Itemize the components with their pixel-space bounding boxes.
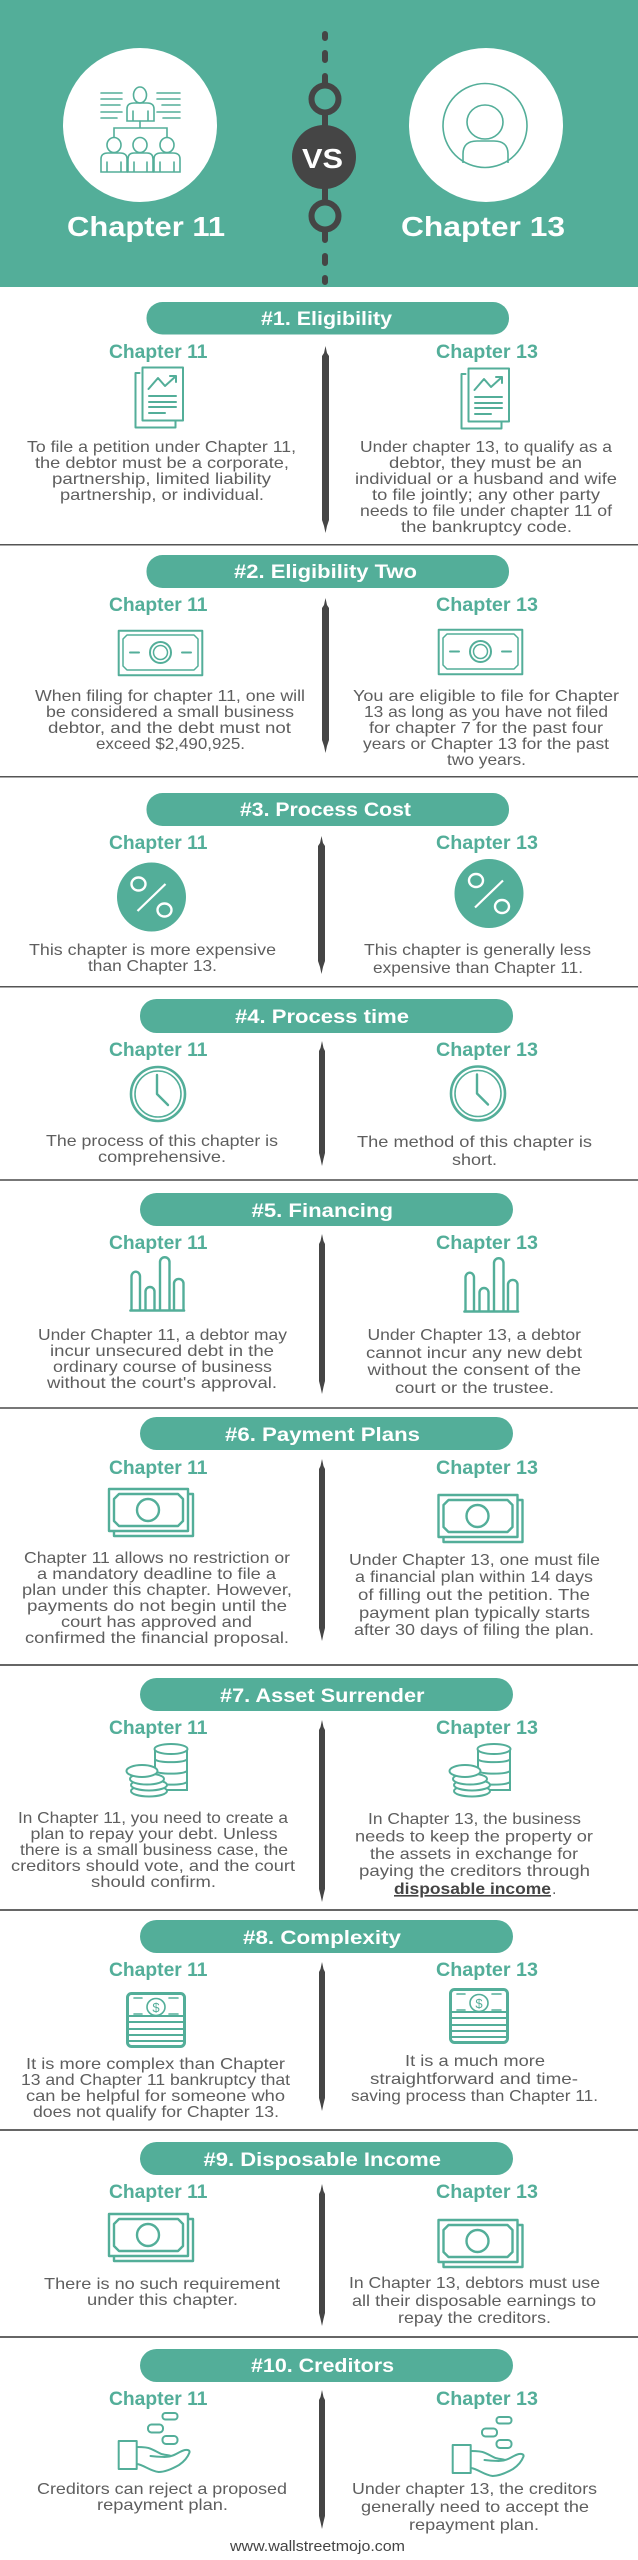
footer: website: www.wallstreetmojo.com — [229, 2538, 405, 2555]
text: Chapter 13 filing eligibility: You are eligible to file for Chapter — [353, 688, 620, 705]
heading pill — [146, 555, 509, 588]
column label: Chapter 13: Chapter 13 — [436, 1959, 538, 1981]
icon: cash stack right — [450, 1990, 508, 2042]
text: Chapter 11 payment plans: Chapter 11 allows no restriction or — [24, 1550, 291, 1567]
column label: Chapter 11: Chapter 11 — [109, 1717, 208, 1739]
text: Chapter 11 payment plans: confirmed the financial proposal. — [25, 1630, 289, 1647]
text: Chapter 11 financing: incur unsecured debt in the — [50, 1343, 274, 1360]
text: Chapter 11 payment plans: payments do not begin until the — [27, 1598, 287, 1615]
column label: Chapter 13: Chapter 13 — [436, 1232, 538, 1254]
heading pill: #8. Complexity — [243, 1927, 401, 1949]
text: Chapter 13 asset surrender: In Chapter 13, the business — [368, 1811, 581, 1828]
heading pill — [140, 2349, 513, 2382]
text: Chapter 11 complexity: can be helpful for someone who — [26, 2088, 285, 2105]
icon: banknote left — [119, 631, 202, 675]
column label: Chapter 13: Chapter 13 — [436, 594, 538, 616]
text: Chapter 11 financing: Under Chapter 11, a debtor may — [38, 1327, 287, 1344]
text: Chapter 13 financing: Under Chapter 13, a debtor — [368, 1327, 582, 1344]
text: Chapter 13 financing: without the consent of the — [366, 1362, 581, 1379]
text: Chapter 11 payment plans: court has approved and — [61, 1614, 252, 1631]
text: Chapter 13 asset surrender: disposable income — [394, 1881, 551, 1898]
text: Chapter 11 eligibility: To file a petition under Chapter 11, — [27, 439, 296, 456]
heading pill — [140, 999, 513, 1033]
column label: Chapter 11: Chapter 11 — [109, 1457, 208, 1479]
text: Chapter 13 complexity: It is a much more — [405, 2053, 545, 2070]
text: Chapter 11 payment plans — [22, 1550, 292, 1647]
divider — [319, 1459, 325, 1641]
heading pill: #5. Financing — [252, 1200, 393, 1222]
heading pill — [140, 1678, 513, 1711]
text: Chapter 13 eligibility: debtor, they must be an — [389, 455, 582, 472]
icon: coins left — [126, 1744, 188, 1796]
text: Chapter 11 asset surrender: In Chapter 11, you need to create a — [18, 1810, 288, 1827]
text: Chapter 13 complexity: straightforward and time- — [370, 2071, 578, 2088]
text: Chapter 13 payment plans: payment plan typically starts — [359, 1605, 590, 1622]
divider — [319, 1962, 325, 2111]
section 6: Payment Plans — [22, 1417, 600, 1647]
text: Chapter 13 asset surrender: the assets in exchange for — [370, 1846, 579, 1863]
text: Chapter 11 cost: This chapter is more expensive — [29, 942, 276, 959]
title: Chapter 13: Chapter 13 — [401, 211, 565, 242]
column label: Chapter 13: Chapter 13 — [436, 341, 538, 363]
text: Chapter 13 cost — [364, 942, 591, 977]
text: Chapter 13 complexity — [351, 2053, 598, 2105]
icon: percent right — [454, 859, 524, 928]
icon: percent left — [117, 862, 186, 932]
text: Chapter 13 creditors: generally need to accept the — [361, 2499, 589, 2516]
VS badge: VS — [302, 143, 343, 174]
column label: Chapter 11: Chapter 11 — [109, 832, 208, 854]
column label: Chapter 13: Chapter 13 — [436, 832, 538, 854]
text: Chapter 13 time: short. — [452, 1152, 497, 1169]
title: Chapter 11: Chapter 11 — [67, 211, 225, 242]
icon: clock left — [131, 1067, 185, 1121]
heading pill — [140, 1193, 513, 1226]
column label: Chapter 11: Chapter 11 — [109, 1039, 208, 1061]
text: Chapter 13 payment plans: after 30 days of filing the plan. — [354, 1622, 594, 1639]
text: Chapter 13 payment plans: a financial plan within 14 days — [355, 1569, 593, 1586]
section 5: Financing — [38, 1193, 583, 1397]
heading pill: #2. Eligibility Two — [234, 561, 417, 583]
text: Chapter 11 complexity: 13 and Chapter 11 bankruptcy that — [21, 2072, 291, 2089]
text: Chapter 13 disposable income: In Chapter 13, debtors must use — [349, 2275, 600, 2292]
text: Chapter 11 small business debtor: be considered a small business — [46, 704, 294, 721]
column label: Chapter 11: Chapter 11 — [109, 594, 208, 616]
text: Chapter 13 eligibility: individual or a husband and wife — [355, 471, 617, 488]
heading pill — [140, 2142, 513, 2175]
section 3: Process Cost — [29, 793, 591, 977]
VS badge — [292, 125, 356, 189]
icon: cash stack left — [128, 1994, 184, 2046]
icon: hand with coins right — [453, 2417, 524, 2476]
section 2: Eligibility Two — [35, 555, 620, 769]
icon: banknotes right — [438, 1495, 522, 1542]
heading pill: #10. Creditors — [251, 2355, 394, 2377]
text: Chapter 11 asset surrender: plan to repay your debt. Unless — [30, 1826, 278, 1843]
text: Chapter 11 eligibility: partnership, or individual. — [60, 487, 264, 504]
text: Chapter 13 eligibility: the bankruptcy code. — [401, 519, 572, 536]
text: Chapter 13 time — [357, 1134, 592, 1169]
icon: banknotes right — [438, 2220, 522, 2267]
text: Chapter 11 asset surrender: there is a small business case, the — [20, 1842, 288, 1859]
text: Chapter 11 financing: without the court's approval. — [46, 1375, 277, 1392]
divider — [319, 1041, 325, 1166]
text: Chapter 13 filing eligibility: years or Chapter 13 for the past — [363, 736, 610, 753]
header panel — [0, 0, 638, 287]
text: Chapter 13 disposable income: all their disposable earnings to — [352, 2293, 596, 2310]
text: Chapter 13 filing eligibility — [353, 688, 620, 769]
text: Chapter 11 payment plans: a mandatory deadline to file a — [37, 1566, 276, 1583]
text: Chapter 11 time — [46, 1133, 278, 1166]
icon: document chart right — [462, 368, 509, 428]
icon: document chart left — [136, 368, 183, 428]
divider — [322, 346, 329, 533]
text: Chapter 11 payment plans: plan under this chapter. However, — [22, 1582, 292, 1599]
icon: bars right — [464, 1258, 518, 1312]
VS connector line — [312, 34, 338, 282]
column label: Chapter 13: Chapter 13 — [436, 2181, 538, 2203]
heading pill: #1. Eligibility — [261, 308, 392, 330]
text: Chapter 11 complexity — [21, 2056, 291, 2121]
text: Chapter 13 cost: This chapter is generally less — [364, 942, 591, 959]
divider — [319, 2184, 325, 2326]
text: Chapter 11 financing — [38, 1327, 287, 1392]
text: Chapter 13 payment plans — [349, 1552, 600, 1639]
text: Chapter 11 time: The process of this chapter is — [46, 1133, 278, 1150]
divider — [322, 598, 329, 753]
text: Chapter 13 asset surrender: . — [552, 1881, 556, 1898]
text: Chapter 11 cost: than Chapter 13. — [88, 958, 217, 975]
heading pill — [146, 302, 509, 334]
icon: clock right — [451, 1066, 505, 1120]
column label: Chapter 11: Chapter 11 — [109, 2388, 208, 2410]
text: Chapter 13 disposable income — [349, 2275, 600, 2327]
text: Chapter 11 disposable income: There is no such requirement — [44, 2276, 281, 2293]
text: Chapter 11 complexity: does not qualify for Chapter 13. — [33, 2104, 279, 2121]
text: Chapter 11 small business debtor: exceed $2,490,925. — [96, 736, 245, 753]
text: Chapter 11 eligibility: the debtor must be a corporate, — [35, 455, 289, 472]
column label: Chapter 11: Chapter 11 — [109, 341, 208, 363]
text: Chapter 13 disposable income: repay the creditors. — [398, 2310, 551, 2327]
text: Chapter 13 asset surrender: paying the creditors through — [359, 1863, 590, 1880]
column label: Chapter 13: Chapter 13 — [436, 2388, 538, 2410]
divider — [319, 1720, 325, 1902]
text: Chapter 11 disposable income: under this chapter. — [87, 2292, 238, 2309]
text: Chapter 11 cost — [29, 942, 276, 975]
heading pill: #3. Process Cost — [240, 799, 412, 821]
icon: banknotes left — [109, 1489, 193, 1536]
text: Chapter 13 creditors — [352, 2481, 597, 2534]
column label: Chapter 11: Chapter 11 — [109, 1959, 208, 1981]
text: Chapter 11 small business debtor — [35, 688, 305, 753]
column label: Chapter 13: Chapter 13 — [436, 1717, 538, 1739]
section 4: Process time — [46, 999, 592, 1169]
text: Chapter 11 small business debtor: When filing for chapter 11, one will — [35, 688, 305, 705]
text: Chapter 13 creditors: repayment plan. — [409, 2517, 539, 2534]
icon: hand with coins left — [119, 2413, 190, 2472]
heading pill: #4. Process time — [235, 1006, 409, 1028]
section 1: Eligibility — [27, 302, 617, 536]
text: Chapter 13 eligibility: Under chapter 13, to qualify as a — [360, 439, 612, 456]
text: Chapter 13 filing eligibility: for chapter 7 for the past four — [369, 720, 604, 737]
text: Chapter 11 time: comprehensive. — [98, 1149, 226, 1166]
text: Chapter 11 asset surrender — [11, 1810, 296, 1891]
text: Chapter 11 eligibility — [27, 439, 296, 504]
column label: Chapter 13: Chapter 13 — [436, 1457, 538, 1479]
text: Chapter 13 financing — [366, 1327, 583, 1397]
text: Chapter 13 payment plans: Under Chapter 13, one must file — [349, 1552, 600, 1569]
section 7: Asset Surrender — [11, 1678, 594, 1902]
text: Chapter 13 financing: cannot incur any new debt — [366, 1345, 583, 1362]
text: Chapter 13 eligibility: to file jointly; any other party — [372, 487, 600, 504]
heading pill — [140, 1920, 513, 1953]
text: Chapter 13 creditors: Under chapter 13, the creditors — [352, 2481, 597, 2498]
heading pill: #6. Payment Plans — [225, 1424, 420, 1446]
icon: Chapter 13 person circle — [409, 48, 563, 202]
text: Chapter 13 payment plans: of filling out the petition. The — [358, 1587, 590, 1604]
divider — [319, 2390, 325, 2529]
text: Chapter 11 small business debtor: debtor, and the debt must not — [48, 720, 292, 737]
section 9: Disposable Income — [44, 2142, 600, 2327]
icon: banknotes left — [109, 2214, 193, 2261]
text: Chapter 11 disposable income — [44, 2276, 281, 2309]
icon: banknote right — [439, 630, 522, 674]
heading pill — [146, 793, 509, 826]
text: Chapter 11 complexity: It is more complex than Chapter — [26, 2056, 286, 2073]
icon: bars left — [130, 1257, 184, 1310]
heading pill: #7. Asset Surrender — [220, 1685, 425, 1707]
text: Chapter 11 financing: ordinary course of business — [53, 1359, 272, 1376]
text: Chapter 13 time: The method of this chapter is — [357, 1134, 592, 1151]
icon: coins right — [450, 1744, 510, 1796]
text: Chapter 11 asset surrender: should confirm. — [91, 1874, 216, 1891]
column label: Chapter 13: Chapter 13 — [436, 1039, 538, 1061]
divider — [319, 1234, 325, 1394]
column label: Chapter 11: Chapter 11 — [109, 1232, 208, 1254]
text: Chapter 13 asset surrender — [355, 1811, 594, 1898]
text: Chapter 11 creditors — [37, 2481, 287, 2514]
text: Chapter 11 creditors: Creditors can reject a proposed — [37, 2481, 287, 2498]
text: Chapter 13 eligibility — [355, 439, 617, 536]
text: Chapter 11 eligibility: partnership, limited liability — [52, 471, 271, 488]
column label: Chapter 11: Chapter 11 — [109, 2181, 208, 2203]
text: Chapter 13 complexity: saving process than Chapter 11. — [351, 2088, 598, 2105]
text: Chapter 13 financing: court or the trustee. — [395, 1380, 554, 1397]
section 8: Complexity — [21, 1920, 598, 2121]
text: Chapter 11 asset surrender: creditors should vote, and the court — [11, 1858, 296, 1875]
text: Chapter 13 asset surrender: needs to keep the property or — [355, 1828, 594, 1846]
text: Chapter 13 filing eligibility: 13 as long as you have not filed — [364, 704, 608, 721]
text: Chapter 13 cost: expensive than Chapter 11. — [373, 960, 583, 977]
divider — [318, 836, 325, 974]
text: Chapter 13 filing eligibility: two years. — [447, 752, 526, 769]
section 10: Creditors — [37, 2349, 597, 2534]
text: Chapter 13 eligibility: needs to file under chapter 11 of — [360, 503, 613, 520]
icon: Chapter 11 organisation circle — [63, 48, 217, 202]
text: Chapter 11 creditors: repayment plan. — [97, 2497, 228, 2514]
heading pill — [140, 1417, 513, 1450]
heading pill: #9. Disposable Income — [204, 2149, 441, 2171]
